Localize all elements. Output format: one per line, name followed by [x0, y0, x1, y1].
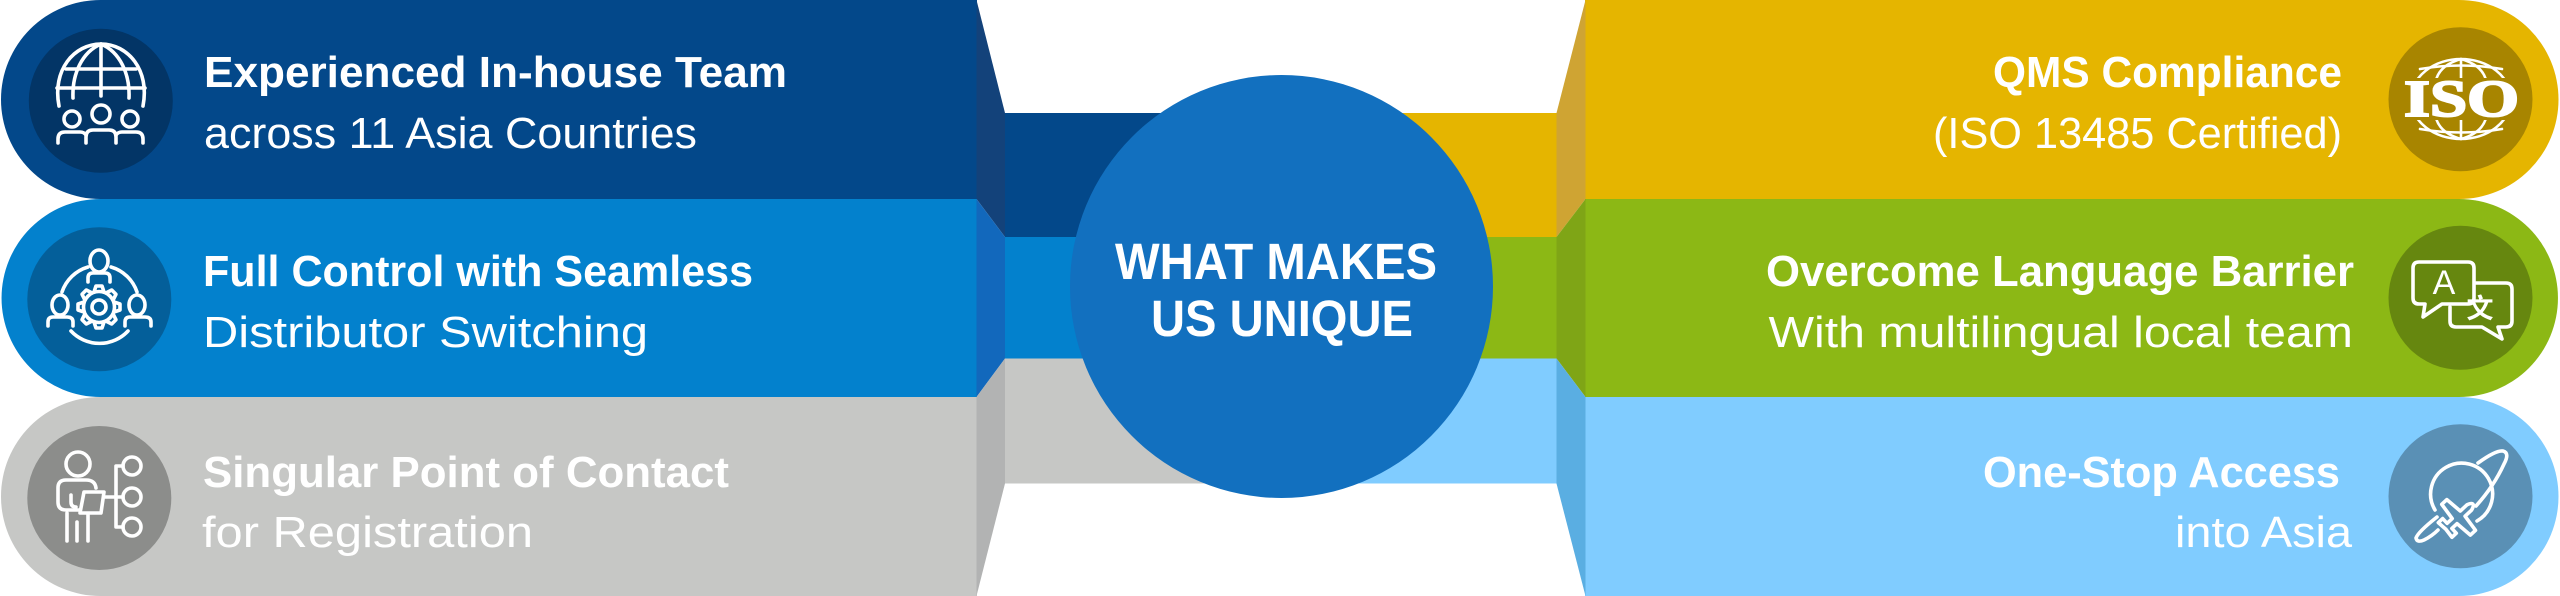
- icon: iso globe logo: ISO: [2404, 71, 2519, 128]
- subheading: for Registration: [202, 508, 533, 557]
- subheading: into Asia: [2175, 508, 2353, 557]
- subheading: With multilingual local team: [1768, 308, 2353, 357]
- heading: QMS Compliance: [1993, 48, 2342, 97]
- panel: overcome language barrier: [1556, 199, 2558, 397]
- icon: translation speech bubbles: A: [2433, 264, 2456, 302]
- icon: team around a gear: [48, 250, 151, 343]
- heading: One-Stop Access: [1983, 448, 2340, 497]
- icon: plane orbiting a globe: [2416, 451, 2507, 545]
- icon: globe with team: [57, 44, 145, 143]
- centre circle with title: [1070, 75, 1493, 498]
- title line 2: US UNIQUE: [1151, 290, 1413, 347]
- icon: translation speech bubbles: 文: [2466, 294, 2494, 324]
- heading: Singular Point of Contact: [203, 448, 729, 497]
- panel: experienced in-house team: [1, 0, 1005, 237]
- title line 1: WHAT MAKES: [1115, 233, 1437, 290]
- subheading: across 11 Asia Countries: [204, 109, 697, 158]
- icon: person with tablet and nodes: [58, 452, 141, 541]
- panel: full control: [2, 199, 1005, 397]
- panel: one-stop access: [1556, 358, 2558, 596]
- panel: qms compliance: [1556, 0, 2558, 237]
- icon: translation speech bubbles: [2413, 262, 2512, 339]
- panel: singular point of contact: [1, 358, 1005, 596]
- icon: iso globe logo: [2404, 59, 2519, 139]
- heading: Experienced In-house Team: [204, 48, 787, 97]
- subheading: Distributor Switching: [203, 308, 648, 357]
- heading: Full Control with Seamless: [203, 247, 753, 296]
- heading: Overcome Language Barrier: [1766, 247, 2354, 296]
- connector bands behind the centre circle: [1005, 113, 1557, 484]
- subheading: (ISO 13485 Certified): [1933, 109, 2342, 158]
